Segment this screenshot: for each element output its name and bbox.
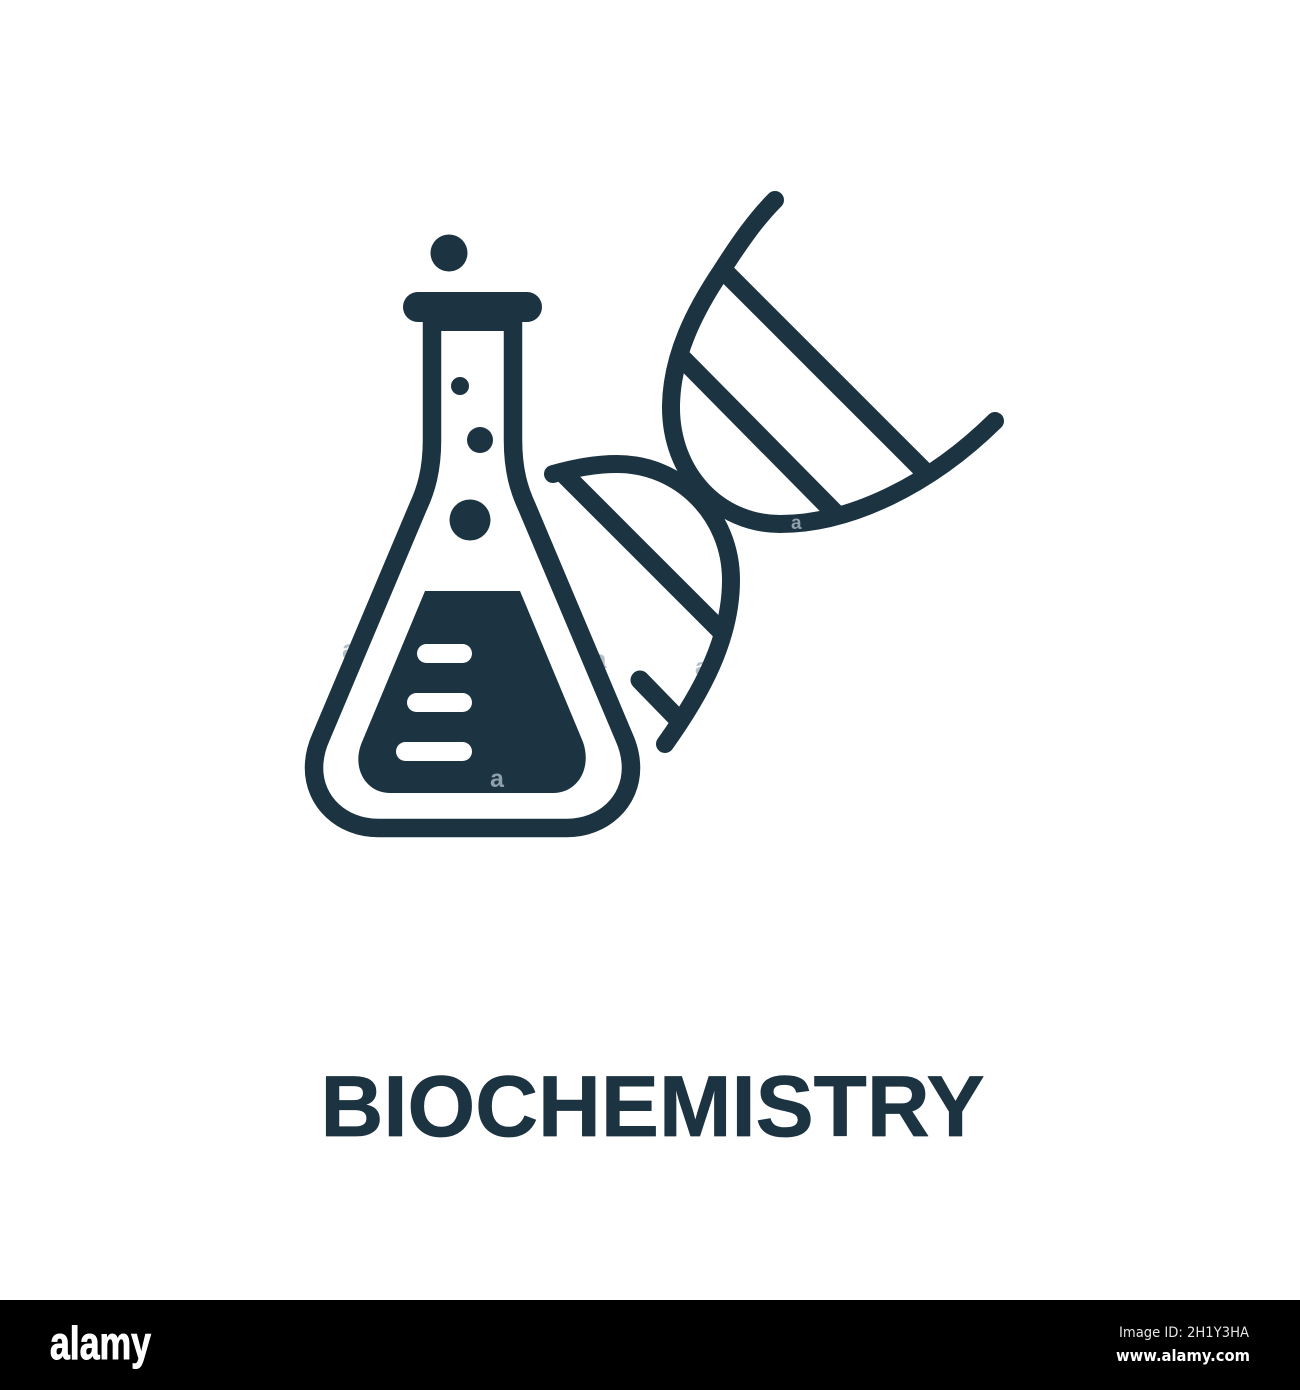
image id: Image ID: 2H1Y3HA — [1119, 1325, 1249, 1341]
faint stock watermark marks: a — [592, 644, 607, 674]
base pair rungs — [560, 269, 930, 632]
alamy logo: alamy — [50, 1317, 151, 1369]
bubbles — [450, 377, 493, 540]
icon: DNA helix — [553, 200, 995, 744]
flask neck inner top — [423, 315, 522, 331]
short rung stub — [640, 680, 675, 716]
watermark letter on strand: a — [791, 513, 802, 534]
upper helix strand — [671, 200, 995, 524]
lower helix strand — [553, 464, 731, 744]
flask stopper ball — [430, 234, 468, 272]
faint stock watermark marks — [342, 634, 709, 681]
icon: conical flask — [314, 234, 631, 828]
footer band — [0, 1300, 1300, 1390]
flask liquid — [358, 591, 586, 793]
title: BIOCHEMISTRY — [320, 1059, 984, 1155]
flask rim — [403, 292, 542, 322]
website: www.alamy.com — [1116, 1346, 1250, 1365]
flask glass outline — [314, 315, 631, 828]
measurement marks — [396, 644, 472, 761]
faint stock watermark marks: a — [695, 654, 709, 681]
faint stock watermark marks: a — [342, 634, 357, 664]
watermark letter on liquid: a — [490, 765, 505, 793]
